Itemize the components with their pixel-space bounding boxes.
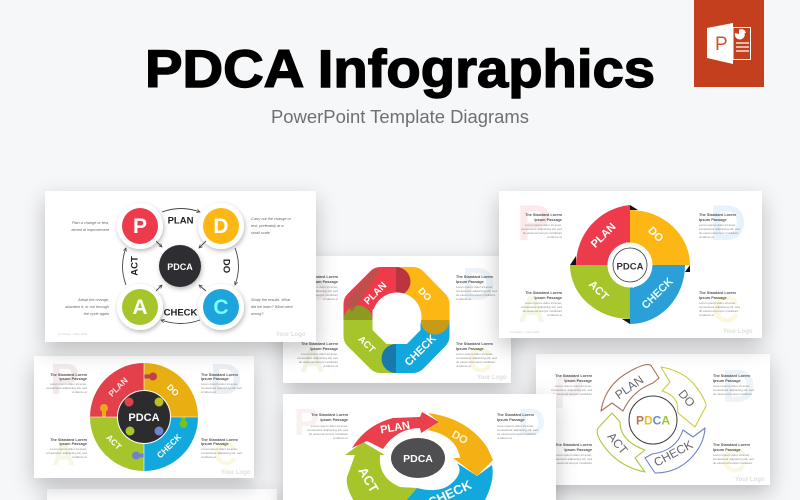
puzzle: text blocks: Ipsum Passage xyxy=(59,377,87,381)
cycle text blocks xyxy=(307,413,538,440)
octagon: text blocks: Lorem ipsum dolor sit amet, xyxy=(456,352,493,356)
octagon: text blocks: ut labore et xyxy=(323,364,338,368)
step labels: PLAN xyxy=(168,216,194,226)
panel: outlined arrows slide xyxy=(536,354,770,485)
cycle text blocks: Ipsum Passage xyxy=(320,418,348,422)
octagon: text blocks: Ipsum Passage xyxy=(310,280,338,284)
pie: text blocks: consectetur adipiscing elit, sed xyxy=(699,227,740,231)
panel: arrow cycle slide: P xyxy=(294,402,319,444)
octagon: text blocks xyxy=(297,275,497,368)
side notes: wrong? xyxy=(251,312,264,316)
title: PDCA Infographics xyxy=(145,40,655,99)
outline text blocks: Ipsum Passage xyxy=(564,448,592,452)
outline text blocks: Ipsum Passage xyxy=(713,448,741,452)
pie: text blocks: Ipsum Passage xyxy=(699,296,727,300)
outline text blocks: do eiusmod tempor incididunt xyxy=(713,461,752,465)
side notes: Adopt the change, xyxy=(77,298,109,302)
cycle text blocks: ut labore et xyxy=(333,436,348,440)
puzzle: text blocks: Ipsum Passage xyxy=(201,377,229,381)
outline arrow: act xyxy=(597,413,645,472)
puzzle: text blocks: consectetur adipiscing elit, sed xyxy=(46,386,87,390)
outline text blocks: Lorem ipsum dolor sit amet, xyxy=(555,384,592,388)
panel: pie slide: P xyxy=(517,195,550,251)
side notes: small scale xyxy=(251,231,270,235)
pie: text blocks: Ipsum Passage xyxy=(699,218,727,222)
puzzle: text blocks: ut labore et xyxy=(72,390,87,394)
puzzle: piece labels: CHECK xyxy=(155,431,184,460)
puzzle: text blocks: Ipsum Passage xyxy=(201,442,229,446)
panel: octagon slide xyxy=(283,256,511,383)
pie: text blocks: The Standard Lorem xyxy=(525,291,563,295)
circle D: D xyxy=(213,215,229,238)
step labels xyxy=(130,216,232,318)
panel: puzzle slide: Your Logo xyxy=(221,470,251,476)
puzzle: text blocks: consectetur adipiscing elit, sed xyxy=(201,451,242,455)
octagon: plan band xyxy=(358,282,396,320)
pie: center badge xyxy=(608,242,652,288)
side notes: abandon it, or run through xyxy=(65,305,109,309)
outline text blocks: The Standard Lorem xyxy=(713,443,751,447)
cycle text blocks: do eiusmod tempor incididunt xyxy=(309,432,348,436)
outline text blocks: Lorem ipsum dolor sit amet, xyxy=(555,453,592,457)
puzzle: text blocks: ut labore et xyxy=(72,455,87,459)
puzzle: text blocks: Lorem ipsum dolor sit amet, xyxy=(201,447,238,451)
cycle center label: PDCA xyxy=(403,453,433,465)
cycle arrow: act xyxy=(345,442,417,500)
pie: text blocks: ut labore et xyxy=(699,313,714,317)
outline arrow: plan xyxy=(601,365,659,411)
octagon: text blocks: Ipsum Passage xyxy=(456,280,484,284)
circle A xyxy=(117,284,163,330)
outline arrow: check xyxy=(645,428,705,473)
side notes: aimed at improvement xyxy=(71,228,110,232)
panel: puzzle slide: A xyxy=(52,436,75,472)
cycle labels: ACT xyxy=(355,464,382,495)
pie: text blocks: consectetur adipiscing elit, sed xyxy=(521,305,562,309)
octagon: labels: ACT xyxy=(355,334,377,356)
octagon: overlap caps xyxy=(344,267,450,373)
octagon: act band xyxy=(358,320,396,358)
puzzle: text blocks xyxy=(46,373,242,459)
octagon: text blocks: The Standard Lorem xyxy=(301,275,339,279)
icon: PowerPoint logo: P xyxy=(715,34,728,55)
panel: pie slide: Your Logo xyxy=(723,329,753,335)
cycle labels: PLAN xyxy=(379,419,411,436)
octagon: text blocks: consectetur adipiscing elit, sed xyxy=(456,289,497,293)
octagon: labels: PLAN xyxy=(362,280,389,307)
outline text blocks: Lorem ipsum dolor sit amet, xyxy=(713,453,750,457)
outline arrow labels: ACT xyxy=(605,430,631,458)
cycle text blocks: The Standard Lorem xyxy=(497,413,535,417)
outline text blocks: Lorem ipsum dolor sit amet, xyxy=(713,384,750,388)
outline text blocks: consectetur adipiscing elit, sed xyxy=(551,388,592,392)
octagon: text blocks: Lorem ipsum dolor sit amet, xyxy=(456,285,493,289)
puzzle: text blocks: Lorem ipsum dolor sit amet, xyxy=(201,382,238,386)
cycle text blocks: consectetur adipiscing elit, sed xyxy=(497,428,538,432)
side notes: the cycle again xyxy=(84,312,109,316)
panel: puzzle slide: D xyxy=(210,355,242,404)
outline text blocks xyxy=(551,374,754,465)
cycle text blocks: The Standard Lorem xyxy=(311,413,349,417)
puzzle: center hub xyxy=(118,390,170,444)
panel: octagon slide: A xyxy=(300,342,325,380)
octagon: text blocks: Lorem ipsum dolor sit amet, xyxy=(301,285,338,289)
outline text blocks: do eiusmod tempor incididunt xyxy=(553,461,592,465)
pie: text blocks: Ipsum Passage xyxy=(534,296,562,300)
pie: text blocks: Lorem ipsum dolor sit amet, xyxy=(699,301,736,305)
panel: arrow cycle slide xyxy=(283,394,556,500)
octagon: text blocks: consectetur adipiscing elit, sed xyxy=(297,356,338,360)
octagon: text blocks: ut labore et xyxy=(323,297,338,301)
puzzle: check piece xyxy=(144,417,198,471)
puzzle: act piece xyxy=(90,417,144,471)
octagon: labels: DO xyxy=(415,286,433,304)
puzzle: text blocks: Lorem ipsum dolor sit amet, xyxy=(50,447,87,451)
pie: text blocks xyxy=(521,213,740,317)
cycle arrows xyxy=(122,208,238,324)
octagon: text blocks: Lorem ipsum dolor sit amet, xyxy=(301,352,338,356)
pie: text blocks: ut labore et xyxy=(547,235,562,239)
panel: pie slide: Company - Date 2020 xyxy=(510,330,540,334)
cycle text blocks: Lorem ipsum dolor sit amet, xyxy=(497,424,534,428)
outline arrow labels: DO xyxy=(675,387,698,410)
octagon: labels: CHECK xyxy=(403,333,439,369)
panel: puzzle slide xyxy=(34,355,254,478)
outline arrow labels: CHECK xyxy=(651,437,695,469)
puzzle: do piece xyxy=(144,363,198,417)
cycle text blocks: do eiusmod tempor incididunt xyxy=(497,432,536,436)
puzzle: text blocks: The Standard Lorem xyxy=(50,373,88,377)
subtitle: PowerPoint Template Diagrams xyxy=(271,107,529,127)
pie: labels xyxy=(586,221,676,312)
cycle center xyxy=(391,438,445,478)
panel: outlined arrows slide: D xyxy=(722,360,755,412)
outline text blocks: consectetur adipiscing elit, sed xyxy=(713,457,754,461)
puzzle: hub notches xyxy=(124,398,164,436)
octagon: text blocks: do eiusmod tempor incididunt xyxy=(456,293,495,297)
puzzle: piece labels xyxy=(104,375,184,460)
outline arrow labels xyxy=(605,373,698,469)
outline ring xyxy=(629,396,677,444)
pie: text blocks: consectetur adipiscing elit, sed xyxy=(699,305,740,309)
octagon: text blocks: Ipsum Passage xyxy=(456,347,484,351)
octagon: text blocks: The Standard Lorem xyxy=(456,342,494,346)
puzzle: text blocks: consectetur adipiscing elit, sed xyxy=(46,451,87,455)
octagon: text blocks: do eiusmod tempor incididunt xyxy=(299,360,338,364)
cycle arrow: do xyxy=(427,413,493,476)
panel: circles slide: Company - Date 2020 xyxy=(58,332,88,336)
pie: text blocks: do eiusmod tempor incididunt xyxy=(699,231,738,235)
circle A: A xyxy=(132,296,148,319)
cycle labels: DO xyxy=(449,429,470,447)
pie: text blocks: The Standard Lorem xyxy=(525,213,563,217)
panel: octagon slide: Your Logo xyxy=(477,375,507,381)
outline center label: PDCA xyxy=(636,414,670,428)
panel: outlined arrows slide: C xyxy=(722,442,747,480)
puzzle: text blocks: ut labore et xyxy=(201,455,216,459)
puzzle: text blocks: ut labore et xyxy=(201,390,216,394)
octagon: text blocks: The Standard Lorem xyxy=(456,275,494,279)
panel: octagon slide: D xyxy=(462,258,495,310)
side notes: Carry out the change or xyxy=(251,217,292,221)
pie: labels: ACT xyxy=(586,278,611,303)
panel: pie slide xyxy=(499,191,762,338)
octagon: text blocks: do eiusmod tempor incididunt xyxy=(456,360,495,364)
panel: circles slide xyxy=(45,191,316,342)
pie: text blocks: Lorem ipsum dolor sit amet, xyxy=(525,301,562,305)
pie: do xyxy=(630,210,690,265)
panel: puzzle slide: P xyxy=(50,355,79,404)
panel: pie slide: D xyxy=(710,195,746,251)
side notes: Plan a change or test, xyxy=(72,221,109,225)
outline text blocks: do eiusmod tempor incididunt xyxy=(553,392,592,396)
pie: text blocks: do eiusmod tempor incididunt xyxy=(699,309,738,313)
center circle PDCA xyxy=(159,245,201,287)
pie: text blocks: The Standard Lorem xyxy=(699,291,737,295)
circle P xyxy=(117,203,163,249)
step labels: DO xyxy=(220,259,232,273)
outline text blocks: do eiusmod tempor incididunt xyxy=(713,392,752,396)
puzzle: piece labels: DO xyxy=(165,382,181,398)
puzzle: text blocks: The Standard Lorem xyxy=(50,438,88,442)
octagon: hole xyxy=(372,292,422,342)
outline text blocks: Ipsum Passage xyxy=(564,379,592,383)
panel: pie slide: A xyxy=(518,289,545,331)
pie: labels: DO xyxy=(645,225,666,245)
side notes: Study the results. What xyxy=(251,298,291,302)
puzzle: piece labels: PLAN xyxy=(106,375,130,399)
puzzle: text blocks: Ipsum Passage xyxy=(59,442,87,446)
pie: text blocks: The Standard Lorem xyxy=(699,213,737,217)
circle D xyxy=(198,203,244,249)
pie: text blocks: ut labore et xyxy=(547,313,562,317)
pie: text blocks: Ipsum Passage xyxy=(534,218,562,222)
octagon: text blocks: ut labore et xyxy=(456,297,471,301)
puzzle: piece labels: ACT xyxy=(104,432,124,452)
pie: center badge: PDCA xyxy=(617,262,644,272)
puzzle: text blocks: Lorem ipsum dolor sit amet, xyxy=(50,382,87,386)
pie: text blocks: Lorem ipsum dolor sit amet, xyxy=(525,223,562,227)
outline text blocks: Ipsum Passage xyxy=(713,379,741,383)
octagon: check band xyxy=(396,320,435,358)
center circle PDCA: PDCA xyxy=(167,262,193,272)
octagon: text blocks: Ipsum Passage xyxy=(310,347,338,351)
outline text blocks: The Standard Lorem xyxy=(713,374,751,378)
octagon: text blocks: consectetur adipiscing elit, sed xyxy=(297,289,338,293)
octagon: text blocks: The Standard Lorem xyxy=(301,342,339,346)
panel: puzzle slide: C xyxy=(214,436,237,472)
arrow cycle graphic xyxy=(345,412,493,500)
cycle arrow: plan xyxy=(352,412,439,449)
pie: labels: CHECK xyxy=(640,276,676,312)
pie: text blocks: do eiusmod tempor incididunt xyxy=(523,231,562,235)
pie: plan xyxy=(576,205,630,265)
cycle text blocks: consectetur adipiscing elit, sed xyxy=(307,428,348,432)
outline text blocks: consectetur adipiscing elit, sed xyxy=(713,388,754,392)
puzzle: text blocks: The Standard Lorem xyxy=(201,438,239,442)
partial bottom slide xyxy=(47,489,277,500)
panel: octagon slide: C xyxy=(468,342,493,380)
pie: text blocks: Lorem ipsum dolor sit amet, xyxy=(699,223,736,227)
cycle text blocks: Ipsum Passage xyxy=(497,418,525,422)
side notes xyxy=(65,217,294,316)
cycle labels xyxy=(355,419,474,500)
octagon: text blocks: do eiusmod tempor incididunt xyxy=(299,293,338,297)
pie: text blocks: consectetur adipiscing elit, sed xyxy=(521,227,562,231)
outline arrow labels: PLAN xyxy=(612,373,646,402)
pie corner tips xyxy=(570,205,690,324)
puzzle: text blocks: The Standard Lorem xyxy=(201,373,239,377)
pie: text blocks: do eiusmod tempor incididunt xyxy=(523,309,562,313)
puzzle: knobs xyxy=(90,363,198,471)
puzzle: text blocks: consectetur adipiscing elit, sed xyxy=(201,386,242,390)
step labels: CHECK xyxy=(164,308,198,318)
panel: outlined arrows slide: Your Logo xyxy=(735,477,765,483)
outline text blocks: The Standard Lorem xyxy=(555,374,593,378)
pie: check xyxy=(630,265,685,324)
outline arrow: do xyxy=(661,367,706,427)
panel: pie slide: C xyxy=(712,289,739,331)
cycle arrow: check xyxy=(398,463,493,500)
step labels: ACT xyxy=(130,256,140,276)
side notes: test, preferably at a xyxy=(251,224,284,228)
pie: labels: PLAN xyxy=(589,221,619,251)
octagon: labels xyxy=(355,280,439,369)
side notes: did we learn? What went xyxy=(251,305,294,309)
cycle text blocks: Lorem ipsum dolor sit amet, xyxy=(311,424,348,428)
panel: octagon slide: P xyxy=(300,270,331,322)
outline text blocks: consectetur adipiscing elit, sed xyxy=(551,457,592,461)
panel: arrow cycle slide: D xyxy=(518,402,545,444)
octagon: do band xyxy=(396,282,435,320)
panel: circles slide: Your Logo xyxy=(276,332,306,338)
outline text blocks: The Standard Lorem xyxy=(555,443,593,447)
octagon: text blocks: ut labore et xyxy=(456,364,471,368)
puzzle: center label: PDCA xyxy=(128,412,160,424)
circle P: P xyxy=(133,215,147,238)
pie: act xyxy=(570,265,630,319)
cycle text blocks: ut labore et xyxy=(497,436,512,440)
octagon: text blocks: consectetur adipiscing elit, sed xyxy=(456,356,497,360)
icon: PowerPoint logo xyxy=(694,0,764,87)
panel: outlined arrows slide: P xyxy=(553,366,584,418)
pie: text blocks: ut labore et xyxy=(699,235,714,239)
puzzle: plan piece xyxy=(90,363,144,417)
circle C: C xyxy=(213,296,229,319)
circle C xyxy=(198,284,244,330)
